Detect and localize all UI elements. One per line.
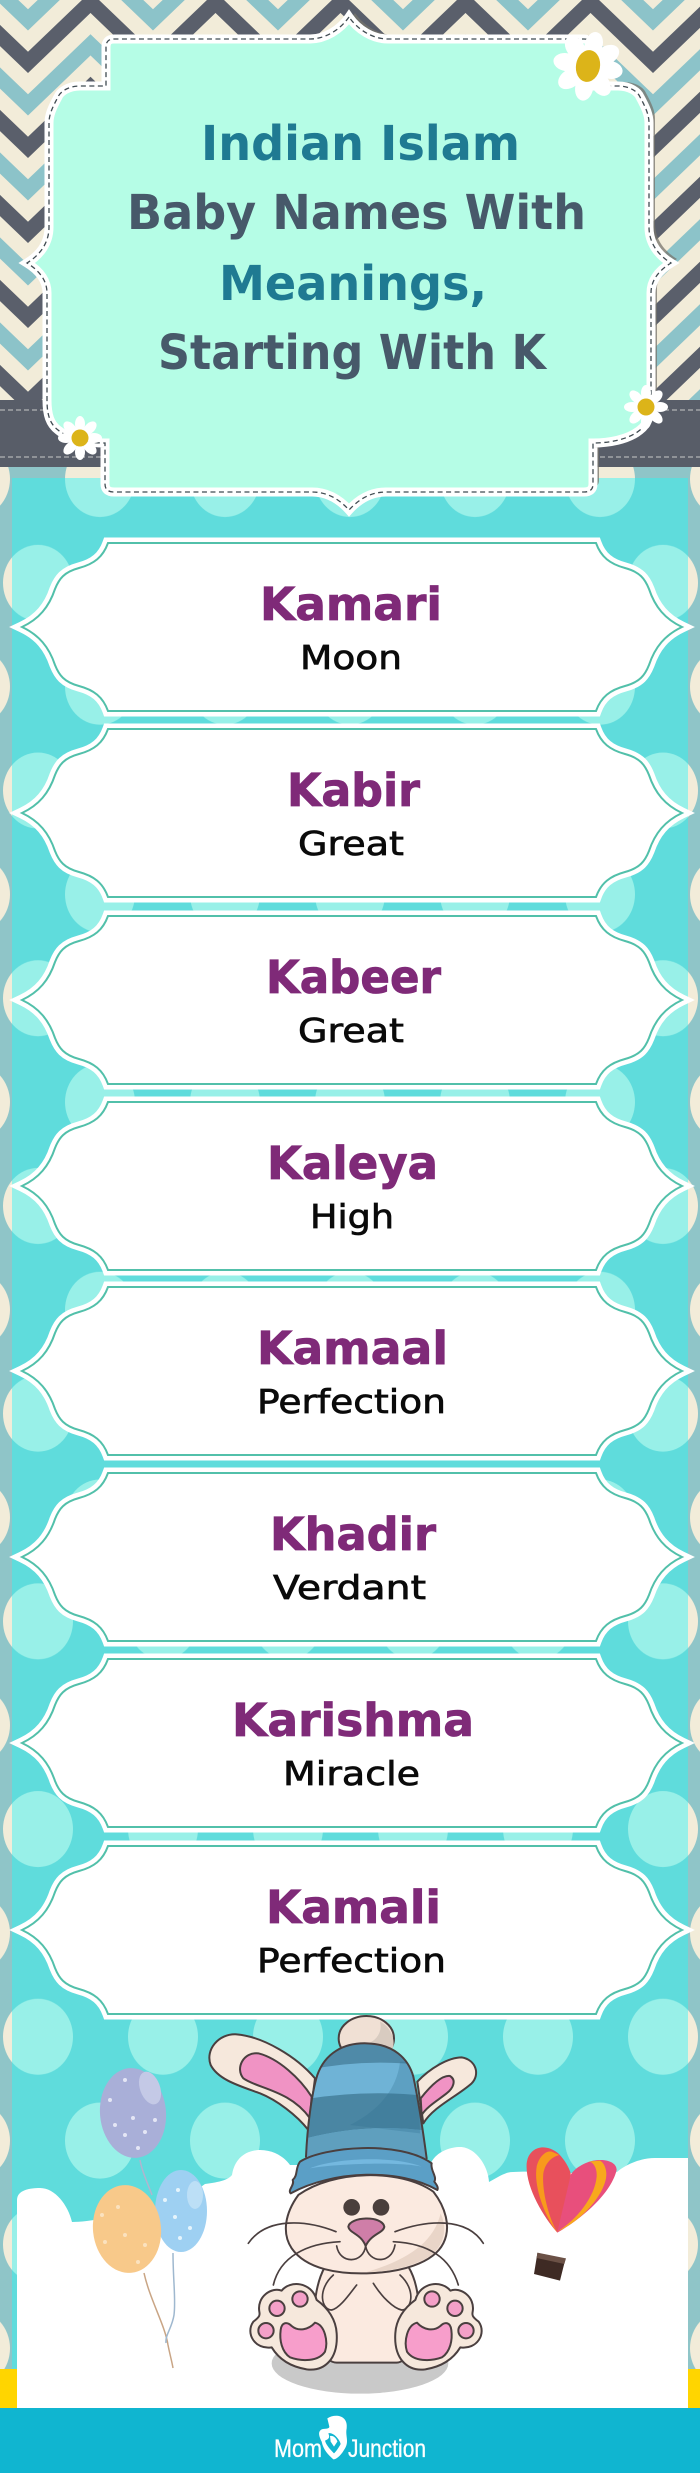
title text bbox=[127, 116, 586, 381]
arms bbox=[322, 2275, 411, 2310]
meaning: Moon bbox=[300, 638, 402, 677]
icon: large daisy top right bbox=[552, 30, 624, 102]
icon: daisy bottom left bbox=[58, 416, 102, 460]
title text: Meanings, bbox=[219, 256, 487, 312]
card: Kabeer bbox=[22, 916, 682, 1084]
card: Khadir bbox=[22, 1473, 682, 1641]
blue balloon bbox=[155, 2170, 207, 2252]
name: Kamali bbox=[266, 1881, 441, 1934]
meaning: Perfection bbox=[257, 1382, 446, 1421]
name: Kabeer bbox=[266, 951, 442, 1004]
icon: heart hot air balloon bbox=[527, 2147, 617, 2281]
card: Kamali bbox=[22, 1846, 682, 2014]
title panel stitching bbox=[27, 17, 671, 510]
card: Kabir bbox=[22, 729, 682, 897]
title text: Starting With K bbox=[158, 325, 548, 381]
stripes bbox=[536, 2151, 559, 2233]
card: Kamaal bbox=[22, 1287, 682, 1455]
right foot bbox=[395, 2284, 482, 2370]
right lobe bbox=[557, 2160, 617, 2233]
footer logo: Junction bbox=[348, 2435, 426, 2463]
name: Kabir bbox=[287, 764, 421, 817]
ground shadow bbox=[272, 2333, 448, 2394]
title panel body bbox=[27, 17, 671, 510]
orange balloon bbox=[89, 2182, 165, 2276]
basket bbox=[534, 2253, 566, 2281]
card: Kamari bbox=[22, 543, 682, 711]
pompom bbox=[339, 2016, 394, 2061]
name: Karishma bbox=[232, 1694, 474, 1747]
background: grey stitched band bbox=[0, 400, 700, 467]
background: chevron header pattern bbox=[0, 0, 700, 400]
meaning: Perfection bbox=[257, 1941, 446, 1980]
background: polka dot panel bbox=[0, 467, 700, 2408]
icon: balloons bbox=[89, 2065, 207, 2368]
yellow corner strips bbox=[0, 2369, 700, 2408]
footer logo bbox=[274, 2416, 426, 2463]
name: Khadir bbox=[270, 1508, 437, 1561]
meaning: Great bbox=[298, 1011, 404, 1050]
left ear bbox=[209, 2034, 315, 2130]
icon: daisy right bbox=[624, 385, 668, 429]
white cloud ground bbox=[17, 2147, 688, 2408]
right ear bbox=[417, 2057, 476, 2123]
hat brim bbox=[290, 2148, 438, 2193]
icon: bunny with striped hat bbox=[209, 2016, 483, 2394]
logo wordmark: Mom bbox=[274, 2435, 322, 2463]
title text: Indian Islam bbox=[201, 116, 520, 172]
body bbox=[314, 2267, 419, 2363]
title text: Baby Names With bbox=[127, 185, 586, 241]
title panel bbox=[27, 13, 677, 510]
whiskers bbox=[248, 2223, 483, 2285]
left lobe bbox=[527, 2147, 571, 2233]
meaning: Verdant bbox=[273, 1568, 426, 1607]
logo icon bbox=[319, 2416, 347, 2459]
name: Kaleya bbox=[267, 1137, 438, 1190]
name: Kamari bbox=[260, 578, 442, 631]
meaning: Miracle bbox=[283, 1754, 420, 1793]
meaning: Great bbox=[298, 824, 404, 863]
hat bbox=[290, 2040, 438, 2193]
card: Karishma bbox=[22, 1659, 682, 1827]
meaning: High bbox=[310, 1197, 394, 1236]
title panel shadow bbox=[33, 13, 677, 506]
head bbox=[286, 2175, 447, 2273]
nose bbox=[348, 2219, 384, 2246]
card: Kaleya bbox=[22, 1102, 682, 1270]
name: Kamaal bbox=[257, 1322, 448, 1375]
mouth bbox=[337, 2245, 395, 2260]
left foot bbox=[250, 2284, 337, 2370]
footer bar bbox=[0, 2408, 700, 2473]
eyes bbox=[343, 2199, 389, 2216]
purple balloon bbox=[96, 2065, 170, 2161]
